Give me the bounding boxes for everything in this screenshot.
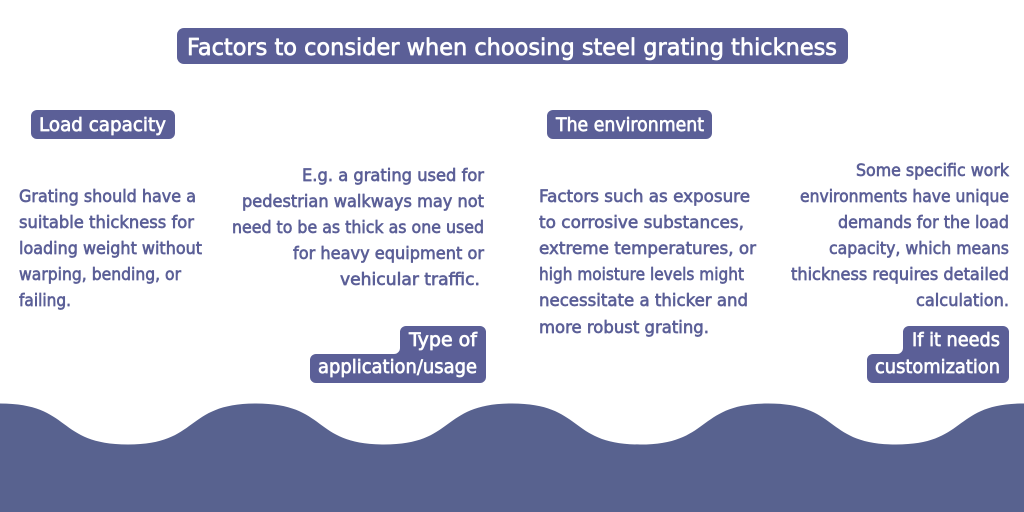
heading: if it needs customization: If it needs xyxy=(912,329,1000,351)
text block: load capacity description xyxy=(19,187,203,310)
text block: application example xyxy=(232,166,485,289)
text block: load capacity description: loading weight without xyxy=(19,239,203,258)
text block: customization description: capacity, which means xyxy=(829,239,1009,258)
text block: load capacity description: failing. xyxy=(19,291,71,310)
text block: application example: need to be as thick as one used xyxy=(232,218,484,237)
heading: if it needs customization: customization xyxy=(875,356,1000,378)
text block: environment description: more robust grating. xyxy=(539,318,709,337)
text block: customization description: environments have unique xyxy=(800,187,1009,206)
text block: application example: pedestrian walkways may not xyxy=(242,192,485,211)
heading: the environment: The environment xyxy=(555,114,704,136)
text block: customization description: demands for the load xyxy=(838,213,1009,232)
text block: environment description: Factors such as exposure xyxy=(539,187,750,206)
heading: if it needs customization xyxy=(867,326,1009,383)
text block: load capacity description: Grating should have a xyxy=(19,187,196,206)
title: Factors to consider when choosing steel grating thickness xyxy=(187,35,837,61)
text block: customization description xyxy=(791,161,1009,310)
heading: type of application/usage: Type of xyxy=(408,329,478,351)
heading: load capacity: Load capacity xyxy=(39,114,166,136)
text block: environment description xyxy=(539,187,756,337)
text block: customization description: Some specific work xyxy=(856,161,1009,180)
text block: application example: E.g. a grating used for xyxy=(302,166,484,185)
text block: environment description: extreme temperatures, or xyxy=(539,239,756,258)
text block: load capacity description: suitable thickness for xyxy=(19,213,194,232)
wave footer xyxy=(0,404,1024,512)
text block: environment description: high moisture levels might xyxy=(539,265,744,284)
heading: type of application/usage: application/usage xyxy=(318,356,477,378)
heading: load capacity xyxy=(31,110,175,139)
text block: customization description: thickness requires detailed xyxy=(791,265,1009,284)
text block: customization description: calculation. xyxy=(916,291,1009,310)
text block: environment description: necessitate a thicker and xyxy=(539,291,748,310)
text block: application example: vehicular traffic. xyxy=(340,270,480,289)
heading: the environment xyxy=(547,110,712,139)
text block: environment description: to corrosive substances, xyxy=(539,213,744,232)
text block: load capacity description: warping, bending, or xyxy=(19,265,181,284)
text block: application example: for heavy equipment or xyxy=(293,244,484,263)
heading: type of application/usage xyxy=(310,326,486,383)
